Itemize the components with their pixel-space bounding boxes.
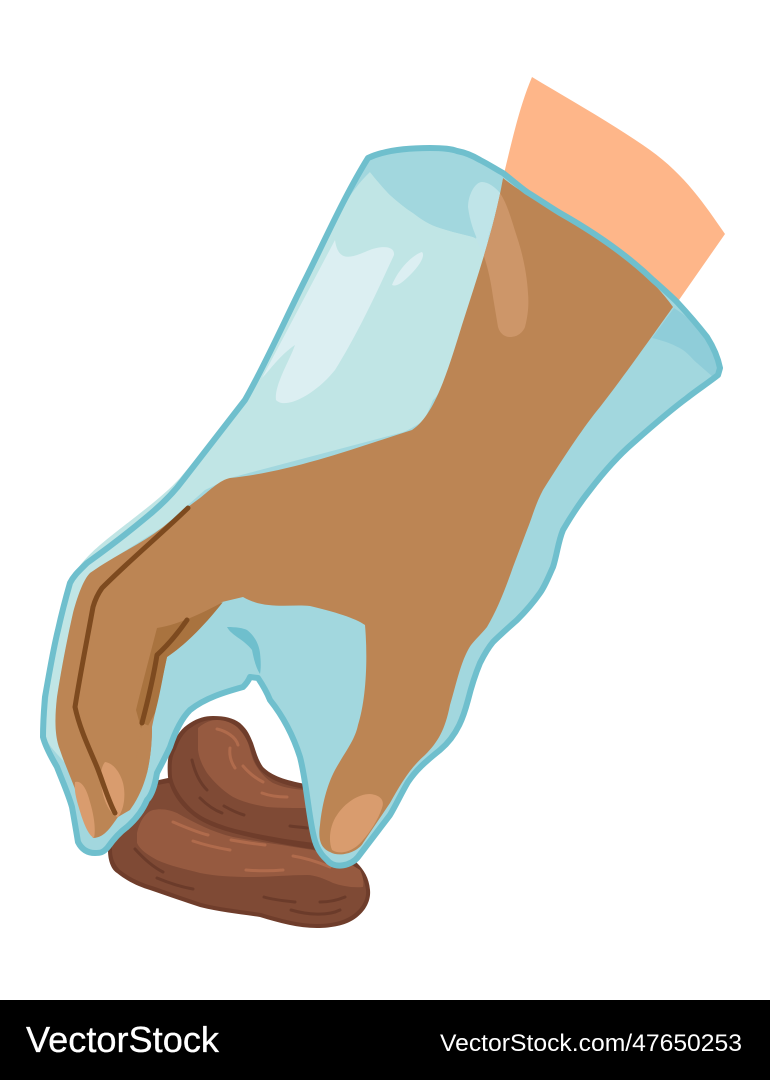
glove fold between fingers xyxy=(227,627,261,674)
wrist above the glove xyxy=(500,77,725,310)
poop lower coil highlight xyxy=(137,809,363,887)
poop xyxy=(108,716,370,928)
index finger overlap xyxy=(136,723,152,773)
poop upper coil highlight xyxy=(198,720,308,808)
glove outline xyxy=(43,148,720,866)
glove top band xyxy=(368,148,503,240)
fingernails xyxy=(75,762,383,852)
reflection over the top band xyxy=(468,182,500,246)
watermark logo text: VectorStock xyxy=(26,1019,220,1060)
glove highlights xyxy=(262,240,423,403)
glove body xyxy=(43,148,720,866)
poop light texture lines xyxy=(173,729,330,871)
watermark url text: VectorStock.com/47650253 xyxy=(440,1030,742,1057)
watermark bar xyxy=(0,1000,770,1080)
finger crease lines xyxy=(75,508,188,813)
poop upper coil xyxy=(168,716,318,850)
poop dark texture lines xyxy=(135,760,345,914)
poop lower coil xyxy=(108,778,370,928)
thumb shadow xyxy=(136,602,223,735)
glove reflection over the hand xyxy=(484,194,528,337)
glove reflection over the glove xyxy=(468,182,528,337)
glove cuff shading xyxy=(652,308,718,377)
hand xyxy=(55,178,673,854)
glove pale upper panel xyxy=(46,172,488,762)
